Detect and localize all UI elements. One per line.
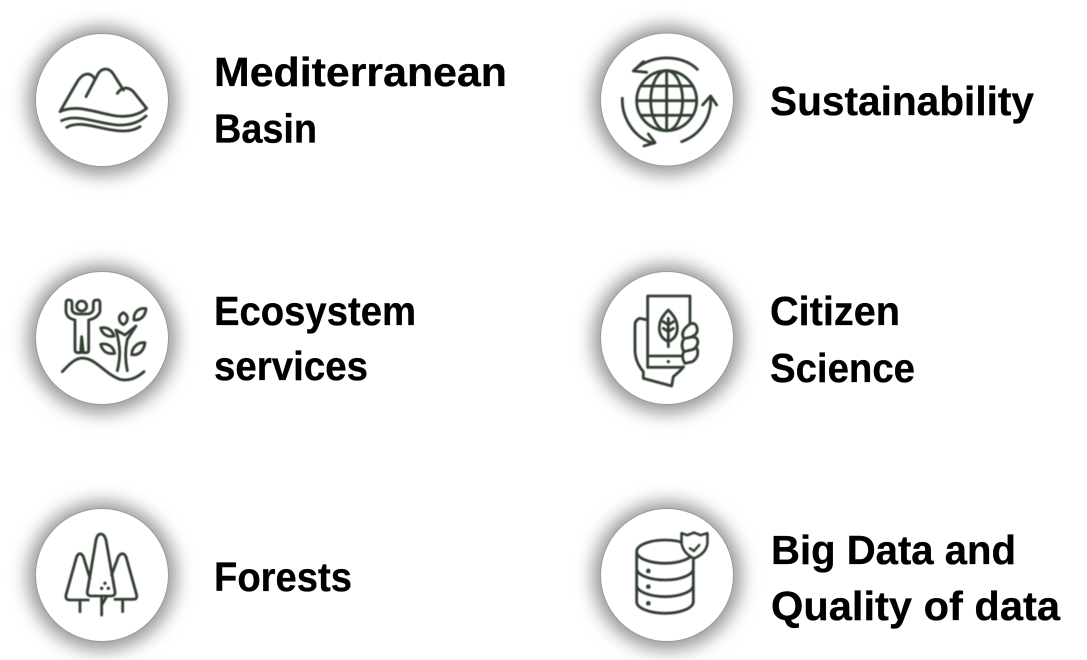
halo shadow — [593, 265, 741, 413]
heading: Big Data and Quality of data — [771, 527, 1061, 629]
icon: person and plant on hill — [62, 300, 146, 380]
panel: Mediterranean Basin — [28, 27, 507, 175]
heading: Mediterranean Basin — [214, 49, 507, 152]
heading: Big Data and Quality of data: Big Data and — [771, 527, 1016, 573]
panel: Sustainability — [593, 26, 1034, 174]
halo shadow — [28, 502, 176, 650]
circle — [36, 272, 168, 404]
icon: database with shield — [637, 533, 707, 613]
halo shadow — [28, 265, 176, 413]
halo shadow — [28, 27, 176, 175]
icon: three trees — [66, 534, 137, 615]
heading: Ecosystem services: Ecosystem — [214, 288, 416, 334]
heading: Mediterranean Basin: Mediterranean — [214, 49, 507, 95]
icon: mountains and water — [60, 69, 147, 131]
circle — [36, 508, 168, 642]
panel: Big Data and Quality of data — [593, 502, 1061, 650]
heading: Ecosystem services: services — [214, 343, 368, 389]
panel: Ecosystem services — [28, 265, 416, 413]
heading: Citizen Science — [770, 288, 915, 391]
heading: Citizen Science: Citizen — [770, 288, 900, 334]
heading: Big Data and Quality of data: Quality of data — [771, 583, 1061, 629]
circle — [600, 272, 734, 404]
icon: hand holding phone with leaf — [635, 296, 698, 386]
heading: Sustainability: Sustainability — [770, 78, 1034, 124]
heading: Mediterranean Basin: Basin — [214, 106, 317, 152]
heading: Forests: Forests — [214, 554, 352, 600]
heading: Ecosystem services — [214, 288, 416, 389]
panel: Citizen Science — [593, 265, 915, 413]
halo shadow — [593, 502, 741, 650]
heading: Citizen Science: Science — [770, 345, 915, 391]
halo shadow — [593, 26, 741, 174]
panel: Forests — [28, 502, 352, 650]
circle — [36, 34, 168, 166]
circle — [600, 508, 734, 642]
icon: globe with circular arrows — [622, 58, 717, 146]
circle — [600, 33, 734, 166]
